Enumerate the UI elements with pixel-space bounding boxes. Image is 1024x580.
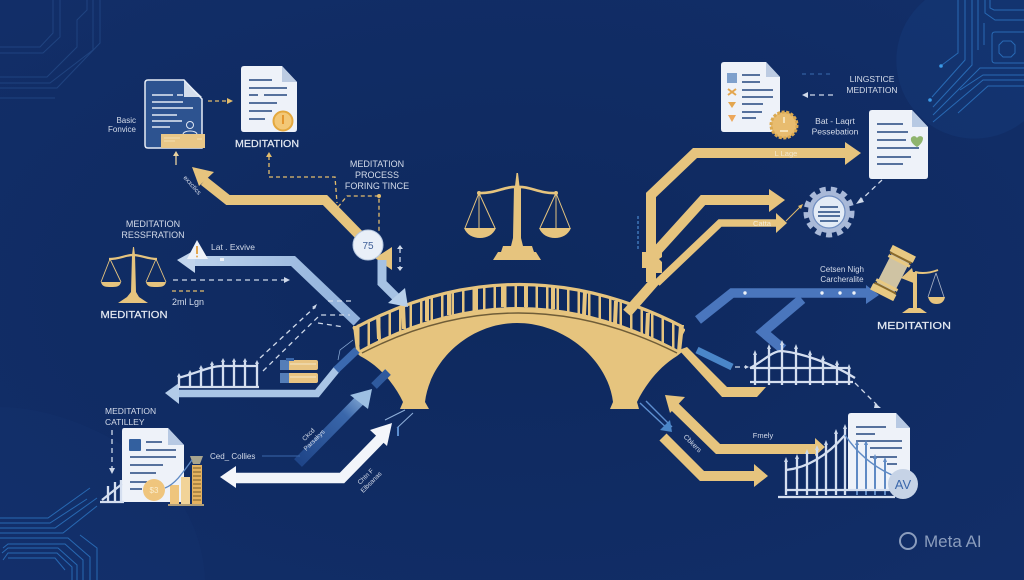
label: rotated white arrow: Chtn F — [357, 468, 375, 486]
arrow: gold lower right — [657, 213, 787, 283]
label: meditation process: MEDITATION — [350, 159, 404, 169]
label: best practice presentation: Pessebation — [812, 126, 859, 136]
books — [280, 358, 318, 383]
small arrows under bridge right — [640, 401, 672, 432]
badge: AV — [888, 469, 918, 499]
arrow: white — [220, 423, 392, 488]
small arrows under bridge left — [385, 410, 413, 436]
label: justice meditation: MEDITATION — [846, 85, 898, 95]
badge: AV: AV — [895, 477, 912, 492]
label: certain high characteristic: Cetsen Nigh — [820, 265, 864, 274]
warning triangle — [187, 240, 208, 259]
dashed arrow right — [173, 277, 290, 283]
dashed arrow to gear — [856, 180, 882, 204]
left scales — [101, 247, 166, 303]
label: rotated blue arrow: Ckcd — [301, 427, 317, 443]
label: meditation top: MEDITATION — [235, 139, 299, 150]
label: small note: 2ml Lgn — [172, 297, 204, 307]
arrow: blue right branch — [763, 299, 802, 349]
gold card — [161, 134, 205, 148]
label: meditation catalog: CATILLEY — [105, 417, 145, 427]
dashed gold connector to badge — [338, 194, 381, 231]
document: top right one — [721, 62, 780, 132]
label: meditation left: MEDITATION — [100, 309, 168, 321]
arrow: gold band from bridge — [679, 347, 766, 397]
dashed arrow down — [109, 430, 115, 474]
label: rotated top left: exxctics — [182, 175, 203, 197]
bridge railing — [353, 284, 684, 352]
arrow: gold lowest — [663, 437, 768, 487]
document: bottom right — [848, 413, 910, 490]
dashed arrow between documents — [208, 98, 233, 104]
label: rotated blue arrow: Parsakys — [303, 428, 327, 453]
dashed vertical marker — [397, 245, 403, 271]
leader line — [262, 455, 300, 457]
central scales of justice — [464, 173, 571, 260]
label: gold arrow lower: Catta — [753, 219, 772, 228]
arrow: light blue into bridge — [382, 260, 408, 307]
gear icon — [806, 189, 852, 235]
bridge arch — [356, 307, 682, 409]
document: bottom left — [122, 428, 184, 502]
label: basic service: Basic — [116, 116, 136, 125]
label: family: Fmely — [753, 431, 773, 440]
document: bottom left: $3 — [150, 486, 159, 495]
dashed arrow to documents — [802, 74, 833, 98]
label: meditation catalog: MEDITATION — [105, 406, 156, 416]
document: meditation top — [241, 66, 297, 132]
label: justice meditation: LINGSTICE — [850, 74, 894, 84]
arrow: gold upper right — [627, 142, 861, 313]
arrow: gold lower back — [665, 395, 825, 456]
label: meditation process: PROCESS — [355, 170, 399, 180]
document: blue basic — [145, 80, 205, 148]
label: meditation right: MEDITATION — [877, 320, 951, 332]
label: meditation respiration: MEDITATION — [126, 219, 180, 229]
label: meditation respiration: RESSFRATION — [121, 230, 185, 240]
gold seal — [771, 112, 797, 138]
diagonal dashed connectors — [260, 301, 352, 371]
document: top right two — [869, 110, 928, 179]
label: cost policies: Ced_ Collies — [210, 452, 255, 461]
arrow: gold middle right — [655, 189, 785, 253]
gold bar chart — [165, 456, 204, 505]
dashed arrow down to document — [855, 383, 881, 408]
arrow: light blue left upper — [177, 250, 357, 322]
label: best practice presentation: Bat - Laqrt — [815, 116, 855, 126]
arrow: small blue — [697, 350, 749, 369]
gavel and small scales — [870, 245, 945, 313]
dashed gold connector — [266, 152, 337, 203]
dashed faint vertical marker — [637, 216, 639, 250]
arrow: blue diagonal — [298, 372, 388, 463]
iron gate — [778, 424, 895, 497]
arrow: blue right upper — [698, 285, 879, 320]
label: last exclusive: Lat . Exvive — [211, 242, 255, 252]
badge: 75 — [353, 230, 383, 260]
small arrow to gear — [786, 204, 803, 221]
label: meditation process: FORING TINCE — [345, 181, 409, 191]
iron fence left — [177, 358, 259, 387]
arrow: light blue left lower — [165, 350, 357, 404]
watermark: Meta AI: Meta AI — [924, 532, 982, 551]
arrow: gold upper left — [192, 167, 392, 270]
iron fence right upper — [750, 340, 855, 385]
label: large arrow: L Lage — [775, 149, 797, 158]
bridge — [353, 284, 684, 409]
label: rotated white arrow: Elbsanas — [360, 470, 384, 495]
short gold dashes — [172, 290, 205, 292]
arrow up to blue document — [173, 151, 179, 165]
thin leader — [338, 340, 353, 360]
mini fence — [100, 480, 124, 502]
label: rotated gold arrow: Cbkers — [682, 434, 703, 455]
label: certain high characteristic: Carcheralite — [820, 275, 864, 284]
badge: 75: 75 — [362, 241, 374, 252]
label: basic service: Fonvice — [108, 125, 137, 134]
